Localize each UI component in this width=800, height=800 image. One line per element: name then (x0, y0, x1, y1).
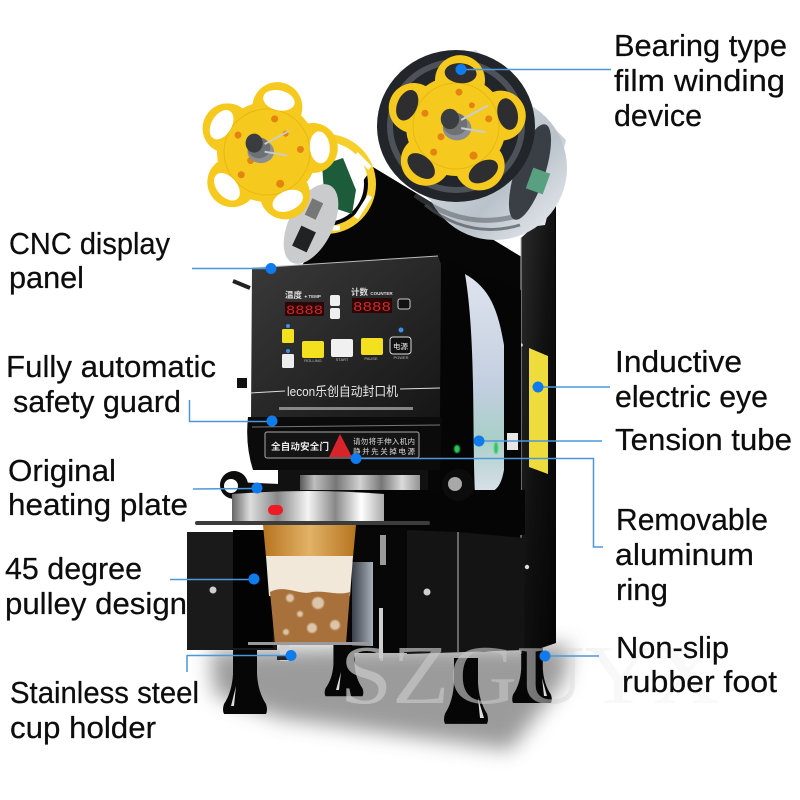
cup holder base (248, 642, 370, 661)
temperature readout (285, 290, 324, 318)
rear frame and wedge (300, 167, 556, 655)
reel: large front yellow spool (382, 49, 531, 194)
yellow warning label (529, 348, 548, 474)
callout: original heating plate (8, 453, 262, 522)
green indicator lights (454, 442, 498, 454)
reel: small front yellow spool (186, 67, 350, 228)
callout: fully automatic safety guard (6, 349, 278, 426)
callout: inductive electric eye (532, 344, 768, 414)
machine feet (223, 645, 552, 724)
control buttons: POWER (393, 355, 409, 360)
callout: inductive electric eye: Inductive (615, 344, 742, 379)
callout: 45 degree pulley design (5, 551, 260, 621)
control panel (233, 256, 441, 417)
control buttons: PAUSE (364, 356, 378, 361)
temperature readout: 8888 (286, 303, 323, 318)
temperature arrows (330, 295, 340, 319)
callout: CNC display panel: CNC display (9, 226, 170, 261)
callout: bearing type film winding device: device (614, 98, 702, 133)
green film roll (322, 158, 356, 214)
callout: CNC display panel (9, 226, 276, 295)
lower right housing (407, 530, 524, 654)
control buttons: ROLLING (304, 358, 322, 363)
callout: removable aluminum ring: aluminum (615, 537, 754, 572)
lower left housing (187, 530, 277, 650)
warning triangle (329, 434, 352, 457)
callout: stainless steel cup holder: Stainless steel (10, 675, 199, 710)
watermark: SZGUYX (340, 629, 720, 722)
callout: bearing type film winding device: Bearing type (614, 28, 787, 63)
safety guard: 全自动安全门 (271, 441, 329, 453)
callout: non-slip rubber foot: Non-slip (616, 630, 729, 665)
left knob (220, 471, 248, 499)
callout: CNC display panel: panel (9, 260, 84, 295)
callout: original heating plate: heating plate (8, 487, 188, 522)
control buttons (282, 324, 411, 368)
callout: 45 degree pulley design: pulley design (5, 586, 187, 621)
temperature readout: 温度 ● TEMP (285, 290, 321, 300)
callout: removable aluminum ring (350, 453, 768, 607)
film tension tube (465, 274, 504, 494)
upper sealing mechanism (220, 469, 525, 535)
control buttons: START (336, 357, 349, 362)
callout: tension tube (474, 422, 792, 457)
brand line (250, 384, 440, 410)
callout: removable aluminum ring: ring (616, 572, 668, 607)
sealing machine (186, 49, 567, 724)
callout: fully automatic safety guard: Fully automatic (6, 349, 216, 384)
floor shadow (210, 645, 570, 750)
safety guard (247, 417, 442, 470)
callout: bearing type film winding device (456, 28, 787, 133)
counter readout (351, 287, 410, 316)
callout: bearing type film winding device: film winding (614, 63, 785, 98)
counter readout: 8888 (353, 300, 391, 316)
callout: tension tube: Tension tube (615, 422, 792, 457)
callout: non-slip rubber foot (540, 630, 777, 699)
callout: 45 degree pulley design: 45 degree (5, 551, 142, 586)
callout: non-slip rubber foot: rubber foot (622, 664, 777, 699)
silver label disc (272, 176, 350, 272)
safety guard: 请勿将手伸入机内 (353, 436, 415, 446)
cup of bubble tea (263, 525, 356, 644)
control buttons: 电源 (393, 341, 408, 351)
safety guard: 静并先关掉电源 (353, 446, 416, 456)
heating plate (195, 491, 430, 525)
brand line: lecon乐创自动封口机 (287, 384, 398, 399)
film roll body (377, 50, 567, 240)
callout: fully automatic safety guard: safety guard (13, 384, 181, 419)
reel: rear small spool (280, 138, 372, 230)
right column (519, 207, 555, 654)
right knob (442, 469, 474, 501)
callout: stainless steel cup holder: cup holder (10, 710, 156, 745)
callout: removable aluminum ring: Removable (616, 502, 768, 537)
callout: stainless steel cup holder (10, 650, 296, 745)
lower mid mechanism (345, 528, 407, 658)
cavity beside panel (440, 256, 521, 525)
callout: inductive electric eye: electric eye (615, 379, 768, 414)
callout: original heating plate: Original (8, 453, 116, 488)
counter readout: 计数 COUNTER (351, 287, 393, 297)
